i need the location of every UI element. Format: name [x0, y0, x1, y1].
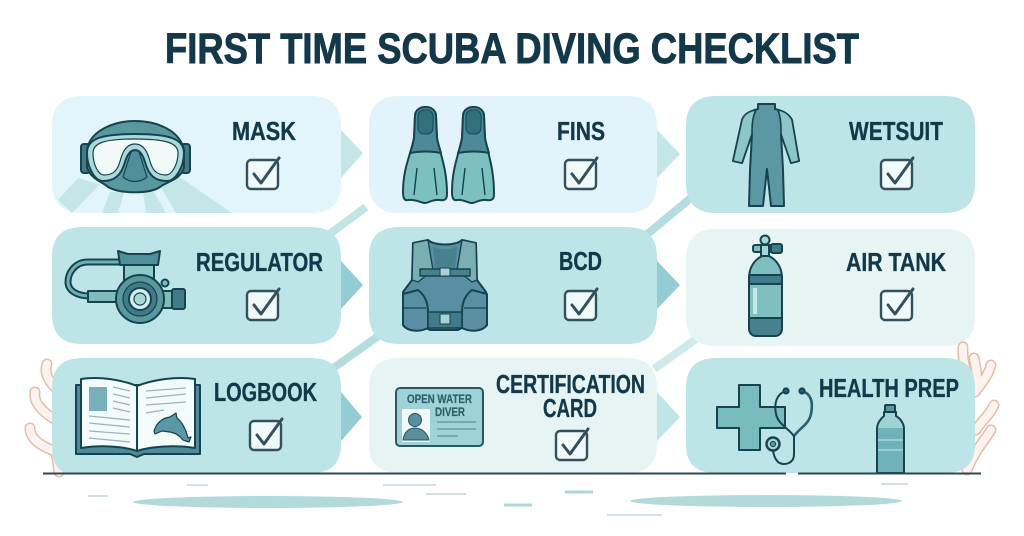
label: logbook: LOGBOOK	[214, 377, 317, 407]
logbook card background	[52, 358, 341, 473]
arrow: regulator to BCD	[341, 261, 363, 309]
air tank card background	[686, 229, 975, 346]
panel: wetsuit	[686, 96, 975, 213]
checkbox: fins	[565, 158, 597, 189]
arrow: logbook to certification	[341, 392, 362, 441]
panel: logbook	[52, 358, 362, 473]
icon: fins	[403, 107, 494, 203]
title: FIRST TIME SCUBA DIVING CHECKLIST	[165, 25, 859, 73]
fins card background	[369, 96, 657, 213]
label: fins: FINS	[557, 116, 605, 146]
panel: air tank	[686, 229, 975, 346]
icon: wetsuit	[733, 104, 799, 206]
BCD card background	[369, 227, 657, 344]
arrow: fins to wetsuit	[657, 130, 680, 178]
checkbox: BCD	[565, 289, 597, 320]
checkbox: wetsuit	[881, 158, 913, 189]
coral: left	[30, 364, 59, 472]
panel: fins	[369, 96, 680, 213]
icon: air tank	[749, 236, 782, 336]
panel: certification card	[369, 358, 680, 473]
checkbox: mask	[247, 158, 279, 189]
icon: open logbook	[76, 378, 200, 457]
icon: ID card: OPEN WATER	[407, 394, 473, 406]
checkbox: air tank	[881, 289, 913, 320]
icon: stethoscope	[766, 388, 812, 464]
icon: ID card: DIVER	[435, 407, 466, 419]
icon: water bottle	[877, 405, 904, 473]
label: certification card: CARD	[543, 393, 597, 423]
label: wetsuit: WETSUIT	[849, 116, 943, 146]
label: mask: MASK	[232, 116, 296, 146]
water shadows and ripples	[88, 484, 908, 515]
mask sun rays	[58, 176, 232, 213]
coral: right	[963, 347, 994, 470]
wetsuit card background	[686, 96, 975, 213]
checkbox: logbook	[250, 419, 282, 450]
label: certification card	[496, 369, 645, 423]
arrow: BCD to air tank	[657, 261, 680, 309]
panel: mask	[52, 96, 363, 213]
label: BCD: BCD	[559, 246, 602, 276]
certification card background	[369, 358, 657, 473]
health prep card background	[686, 358, 975, 473]
icon: BCD vest	[403, 240, 487, 331]
mask card background	[52, 96, 341, 213]
label: air tank: AIR TANK	[846, 247, 946, 277]
arrow: mask to fins	[341, 130, 363, 178]
checkbox: regulator	[247, 289, 279, 320]
panel: BCD	[369, 227, 680, 344]
icon: regulator	[68, 251, 185, 323]
regulator card background	[52, 227, 341, 344]
arrow: certification to health	[657, 392, 680, 441]
label: health prep: HEALTH PREP	[819, 373, 959, 403]
diagonal connectors	[327, 197, 696, 369]
panel: regulator	[52, 227, 363, 344]
icon: dive mask	[81, 121, 190, 192]
icon: medical cross	[717, 385, 785, 450]
icon: ID card	[396, 388, 483, 446]
label: certification card: CERTIFICATION	[496, 369, 645, 399]
panel: health prep	[686, 358, 975, 473]
label: regulator: REGULATOR	[196, 247, 323, 277]
ground line	[43, 472, 981, 474]
checkbox: certification card	[556, 429, 588, 460]
